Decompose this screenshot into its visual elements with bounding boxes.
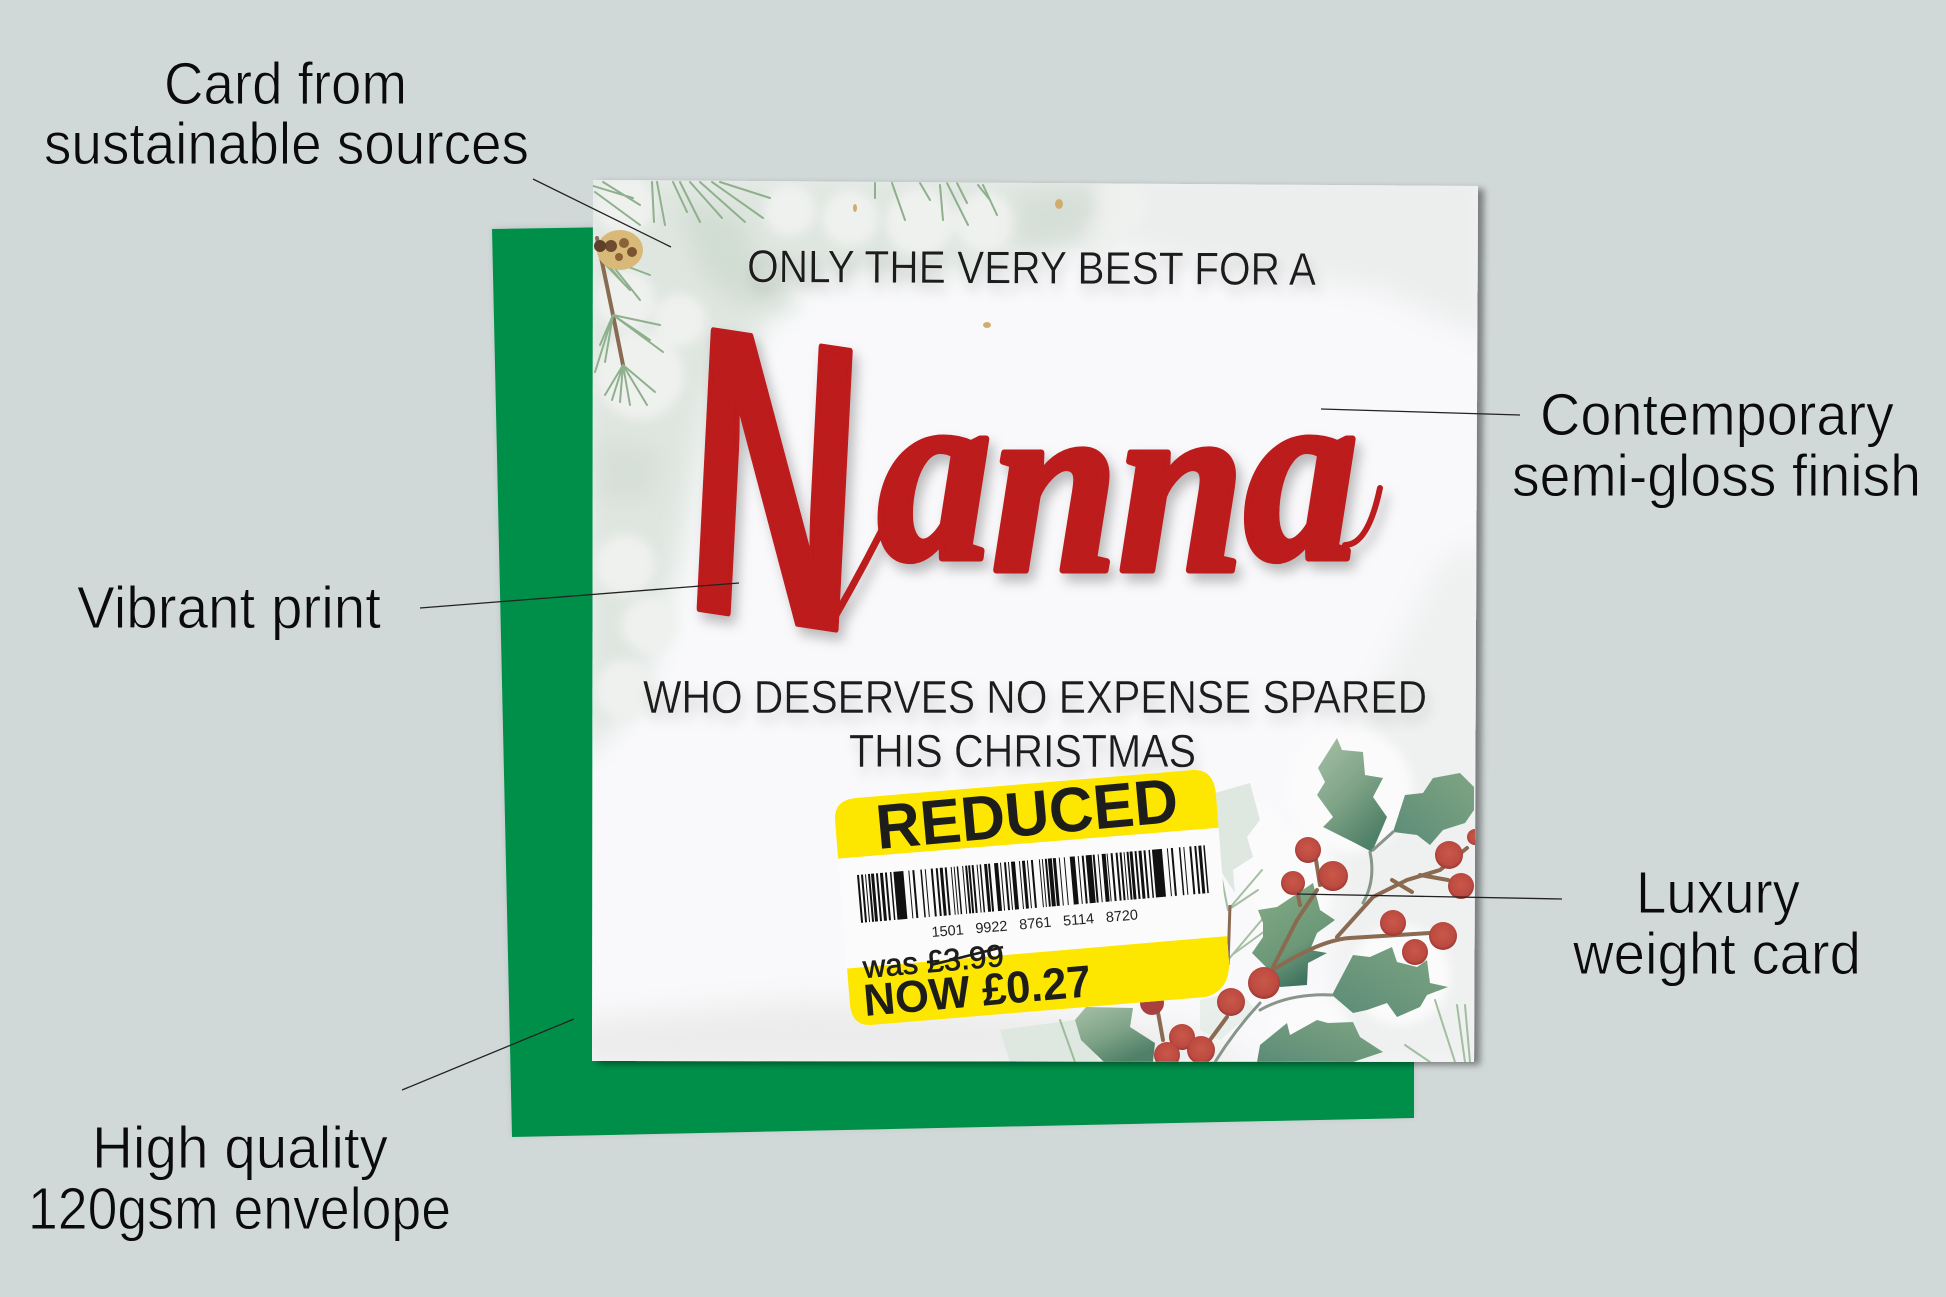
- icon: pale holly leaves: [1000, 783, 1260, 1062]
- label: finish: [1512, 382, 1921, 509]
- label: card source: Card from: [164, 51, 407, 117]
- arrow: finish leader: [1321, 409, 1520, 415]
- arrow: luxury card leader: [1297, 894, 1562, 899]
- label: card source: sustainable sources: [44, 111, 529, 177]
- now price: NOW £0.27: [861, 955, 1093, 1026]
- reduced sticker: [834, 770, 1230, 1025]
- barcode digits: 1501 9922 8761 5114 8720: [931, 907, 1139, 941]
- arrow: card source leader: [533, 179, 671, 247]
- gold flecks: [735, 199, 1063, 444]
- label: luxury card: [1572, 860, 1861, 987]
- icon: pine sprig near sticker: [1060, 870, 1470, 1062]
- envelope: [492, 215, 1414, 1137]
- card name: Nanna: anna: [878, 332, 1358, 626]
- was price: was £3.99: [861, 938, 1005, 985]
- arrow: envelope leader: [402, 1019, 574, 1090]
- card: [580, 170, 1490, 1075]
- label: envelope: 120gsm envelope: [28, 1176, 451, 1242]
- barcode: [859, 869, 1207, 899]
- card text: top line: ONLY THE VERY BEST FOR A: [747, 240, 1316, 295]
- label: vibrant print: Vibrant print: [77, 575, 381, 641]
- label: envelope: [28, 1115, 451, 1242]
- label: luxury card: Luxury: [1636, 860, 1800, 926]
- card text: bottom lines: [643, 671, 1427, 777]
- label: envelope: High quality: [92, 1115, 388, 1181]
- white halo behind holly: [1280, 735, 1448, 1062]
- label: card source: [44, 51, 529, 177]
- icon: holly leaves: [1075, 738, 1474, 1062]
- arrow: vibrant print leader: [420, 583, 739, 608]
- icon: holly berries: [1140, 829, 1483, 1068]
- card name: Nanna: N: [676, 240, 884, 706]
- card artwork: watercolour background: [580, 170, 1490, 1075]
- label: finish: Contemporary: [1540, 382, 1894, 448]
- sticker heading: REDUCED: [873, 766, 1181, 863]
- card text: bottom lines: WHO DESERVES NO EXPENSE SPARED: [643, 671, 1427, 723]
- icon: pine sprigs top left: [590, 182, 997, 405]
- label: finish: semi-gloss finish: [1512, 443, 1921, 509]
- icon: holly stems: [1157, 832, 1467, 1062]
- card text: bottom lines: THIS CHRISTMAS: [849, 725, 1196, 777]
- card name: Nanna: [676, 240, 1380, 706]
- icon: pine cone: [594, 230, 643, 270]
- label: luxury card: weight card: [1572, 921, 1861, 987]
